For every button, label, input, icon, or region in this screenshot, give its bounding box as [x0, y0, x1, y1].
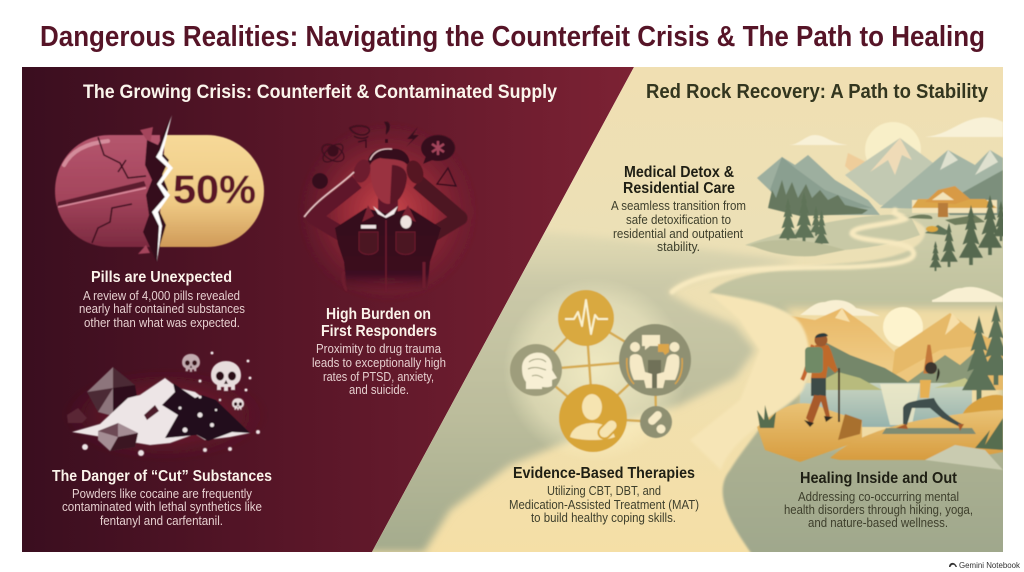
text block: high burden on first responders: High Burden on — [326, 306, 431, 323]
winding path — [672, 210, 914, 292]
text block: healing inside and out: Addressing co-occurring mental — [798, 490, 959, 504]
clouds — [788, 117, 1003, 145]
text block: pills are unexpected: other than what was expected. — [84, 316, 240, 330]
text block: pills are unexpected — [79, 269, 245, 330]
right sage field — [709, 200, 1010, 560]
pines — [962, 305, 1012, 400]
node: brain — [510, 344, 562, 396]
pine trees — [778, 212, 830, 244]
text block: evidence-based therapies: Medication-Assisted Treatment (MAT) — [509, 498, 699, 512]
illustration: cracked pill with 50% — [55, 115, 264, 262]
text block: high burden on first responders: Proximity to drug trauma — [316, 342, 441, 356]
text block: danger of cut substances: The Danger of “Cut” Substances — [52, 468, 272, 485]
icon: sad face — [312, 173, 328, 189]
text block: medical detox — [611, 164, 746, 254]
text block: medical detox: Medical Detox & — [624, 164, 734, 181]
building: retreat lodge — [912, 186, 997, 217]
text block: danger of cut substances: fentanyl and carfentanil. — [100, 514, 223, 528]
text block: high burden on first responders: and suicide. — [349, 383, 409, 397]
node: vital signs — [558, 290, 614, 346]
text block: healing inside and out: and nature-based wellness. — [808, 516, 948, 530]
text block: high burden on first responders: leads to exceptionally high — [312, 356, 446, 370]
node: pills — [640, 406, 672, 438]
icon: tornado — [350, 126, 369, 148]
forest — [820, 342, 910, 384]
text block: medical detox: Residential Care — [623, 180, 735, 197]
illustration: stressed first responder — [302, 121, 468, 292]
panel heading: growing crisis: The Growing Crisis: Counterfeit & Contaminated Supply — [83, 81, 557, 103]
text block: pills are unexpected: nearly half contained substances — [79, 302, 245, 316]
left sage field — [372, 234, 786, 552]
icon: lightning bolt — [407, 128, 419, 146]
text block: medical detox: residential and outpatient — [613, 227, 743, 241]
icon: warning triangle — [437, 168, 456, 186]
text block: high burden on first responders — [312, 306, 446, 397]
lake — [800, 383, 972, 427]
panel: growing crisis — [22, 67, 642, 552]
arms — [313, 182, 357, 236]
text block: danger of cut substances — [52, 468, 272, 528]
clouds — [800, 287, 1003, 316]
text block: evidence-based therapies: to build healthy coping skills. — [531, 511, 676, 525]
diagram: therapies hub — [510, 287, 692, 452]
text block: high burden on first responders: First Responders — [321, 323, 437, 340]
text block: medical detox: A seamless transition from — [611, 199, 746, 213]
gold mountains — [780, 308, 905, 378]
torso — [335, 208, 441, 292]
figure: yoga pose — [896, 345, 964, 431]
node: patient and medication — [559, 384, 627, 452]
grass — [757, 405, 1003, 450]
hub connectors — [552, 331, 658, 423]
icon: exclamation mark — [384, 122, 390, 143]
text block: evidence-based therapies — [509, 465, 699, 525]
distant forest — [768, 180, 868, 216]
stat: 50%: 50% — [173, 168, 256, 212]
text block: healing inside and out: Healing Inside and Out — [800, 470, 957, 487]
text block: evidence-based therapies: Utilizing CBT, DBT, and — [547, 484, 661, 498]
text block: pills are unexpected: Pills are Unexpected — [91, 269, 232, 286]
text block: high burden on first responders: rates of PTSD, anxiety, — [323, 370, 434, 384]
illustration: mountains and retreat — [672, 117, 1009, 292]
icon: skulls — [182, 354, 244, 410]
head — [378, 198, 398, 214]
icon: medical speech bubble — [421, 135, 455, 164]
illustration: hiking and yoga by a lake — [690, 287, 1012, 470]
panel heading: red rock recovery: Red Rock Recovery: A Path to Stability — [646, 80, 989, 103]
panel: path to stability — [330, 67, 1012, 560]
icon: tangled atom — [321, 143, 345, 163]
text block: medical detox: safe detoxification to — [626, 213, 731, 227]
text block: medical detox: stability. — [657, 240, 700, 254]
text block: danger of cut substances: Powders like cocaine are frequently — [72, 487, 253, 501]
rocky ground — [757, 403, 862, 462]
text block: healing inside and out — [784, 470, 973, 530]
text block: evidence-based therapies: Evidence-Based Therapies — [513, 465, 695, 482]
figure: hiker — [802, 333, 839, 427]
yoga mat — [882, 428, 976, 434]
road bend — [690, 293, 809, 470]
node: group therapy — [619, 324, 691, 396]
hands — [354, 160, 371, 183]
text block: healing inside and out: health disorders through hiking, yoga, — [784, 503, 973, 517]
text block: pills are unexpected: A review of 4,000 pills revealed — [83, 289, 240, 303]
text block: danger of cut substances: contaminated with lethal synthetics like — [62, 500, 262, 514]
rock: large crystal — [87, 367, 138, 416]
footer: Gemini Notebook badge: Gemini Notebook — [959, 561, 1021, 570]
illustration: contaminated powder pile — [67, 350, 261, 457]
